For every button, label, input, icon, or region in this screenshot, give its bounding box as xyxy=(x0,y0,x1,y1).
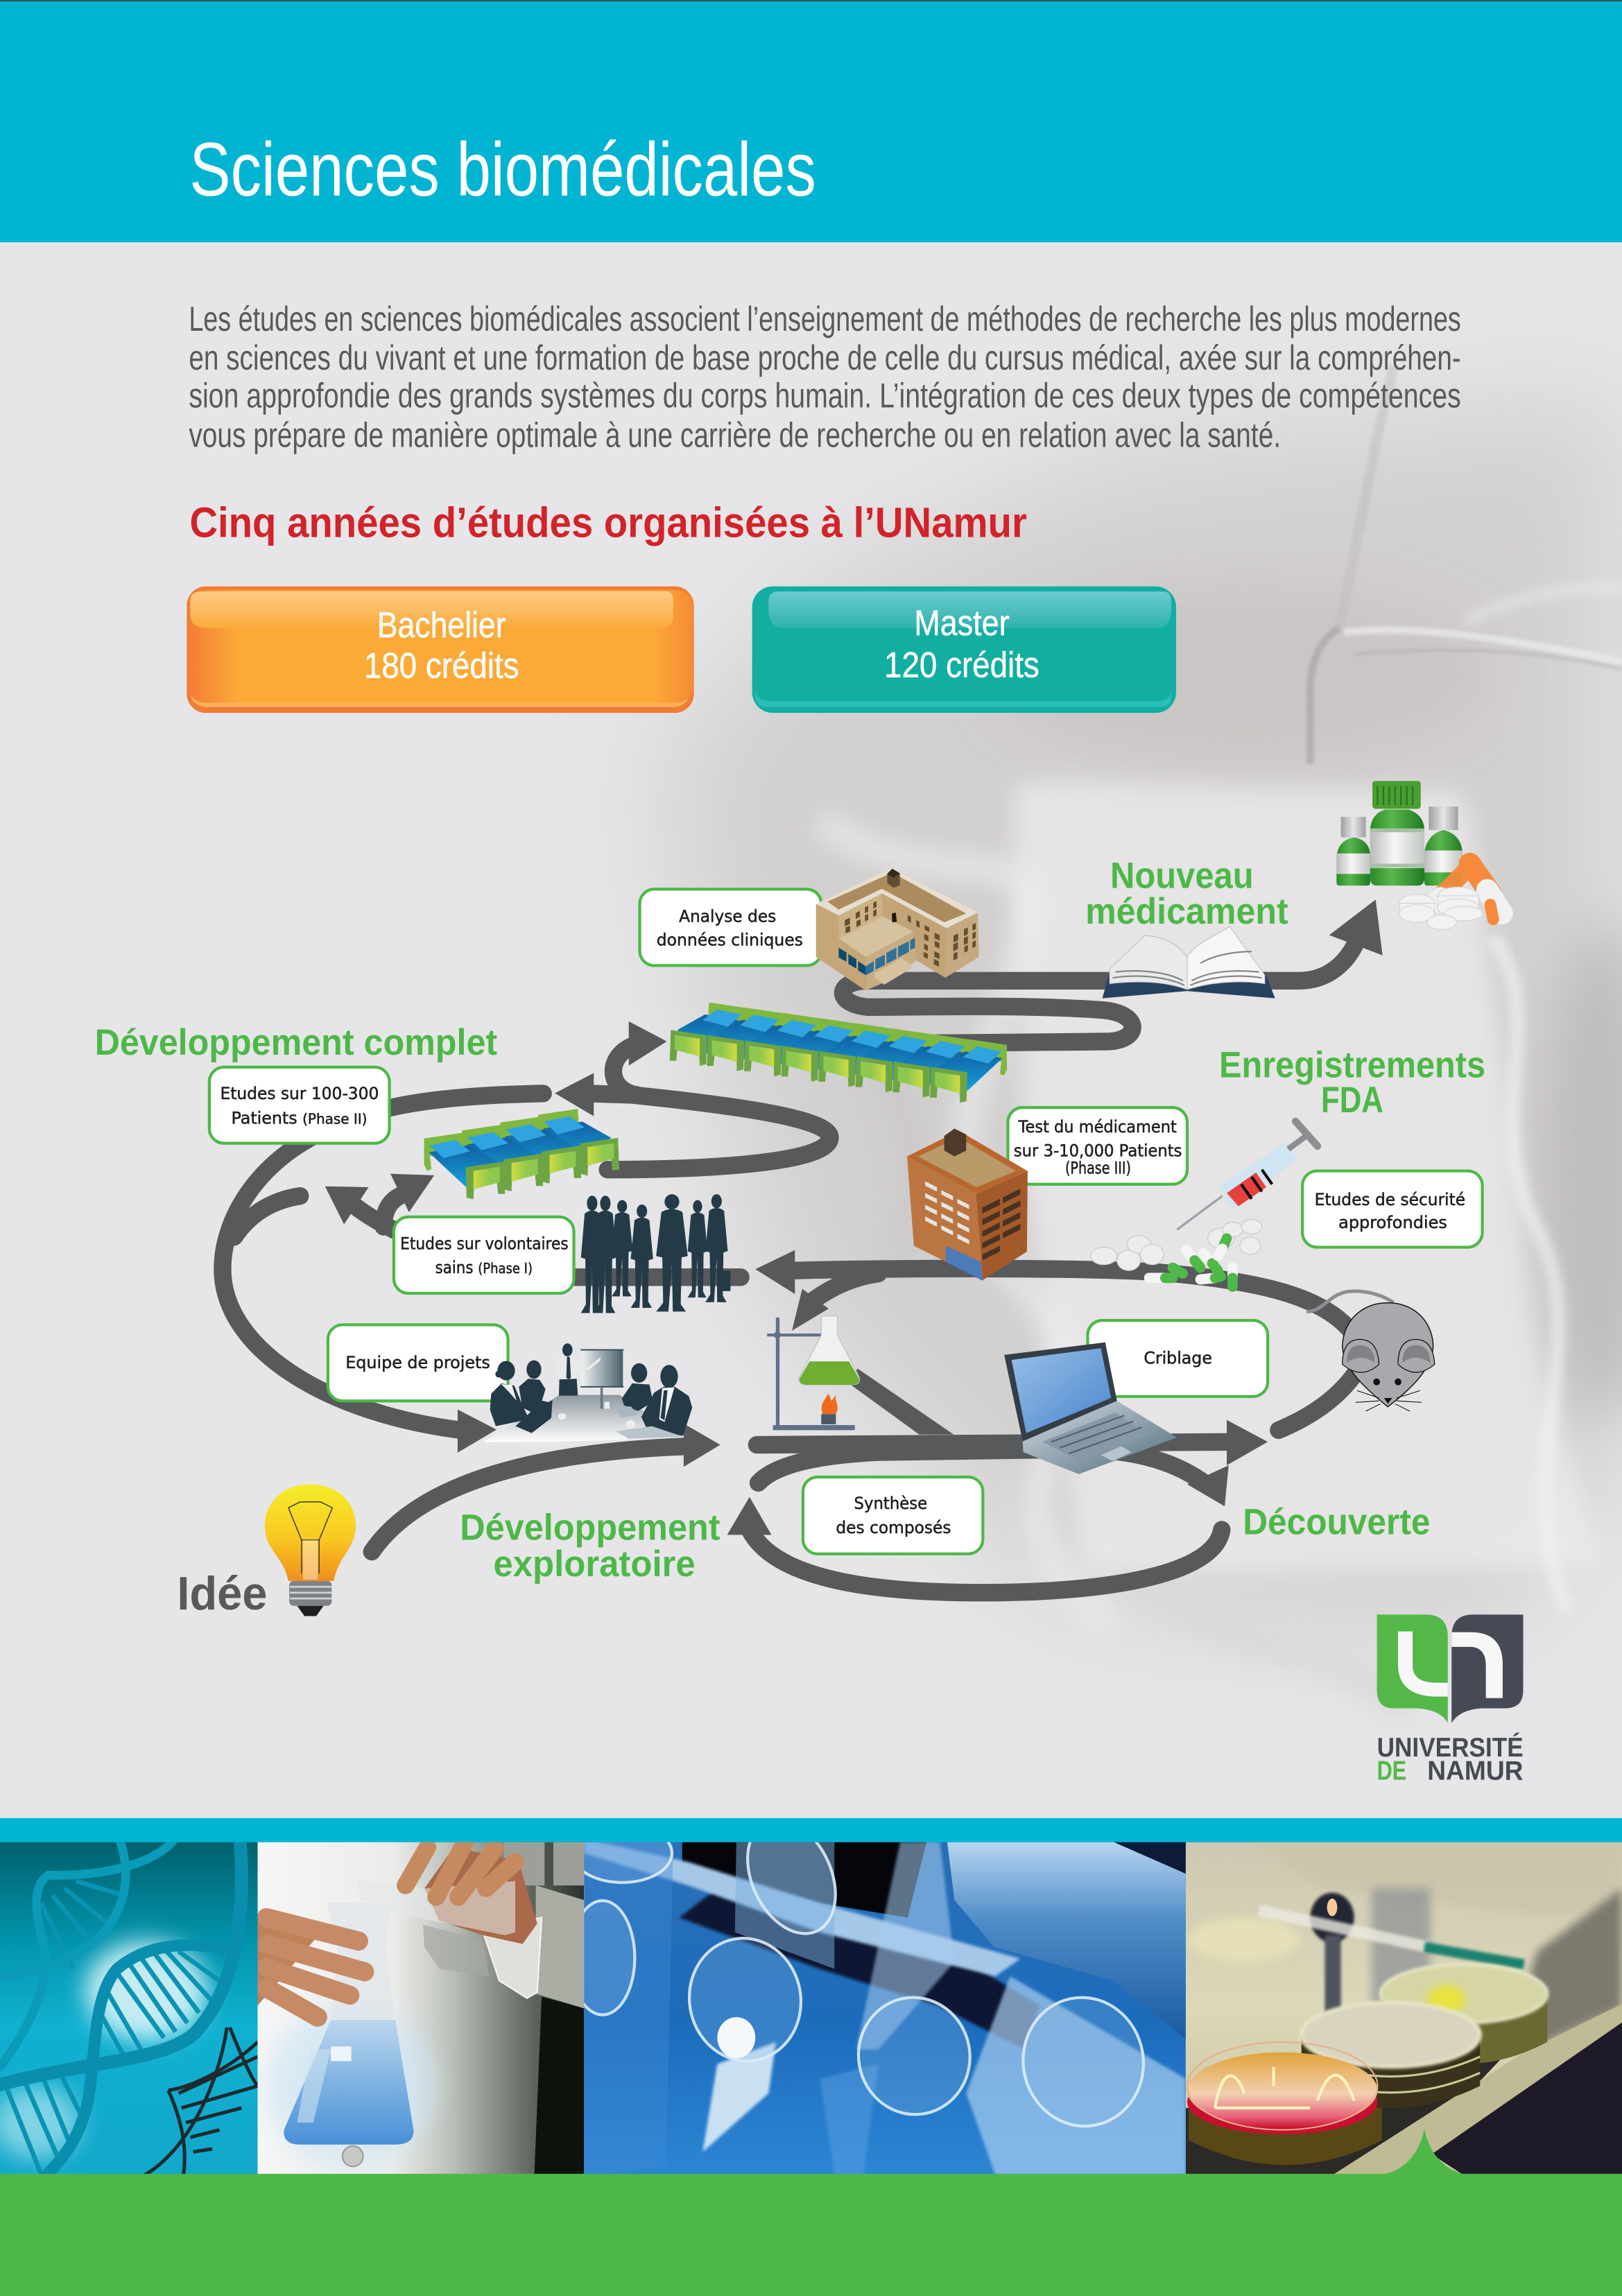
cyan band above photos xyxy=(0,1818,1622,1843)
green footer xyxy=(0,2174,1622,2296)
callout: phase I: sains (Phase I) xyxy=(435,1258,533,1277)
heading: new drug: médicament xyxy=(1085,891,1288,932)
callout: safety studies: Etudes de sécurité xyxy=(1315,1190,1465,1209)
arrow: up to long bed row xyxy=(613,1021,667,1095)
heading: FDA registrations: FDA xyxy=(1321,1080,1383,1121)
icon: syringe xyxy=(1177,1121,1318,1229)
photo: hands pouring blue liquid xyxy=(258,1842,584,2175)
callout: phase I xyxy=(394,1217,574,1293)
icon: medicine bottles xyxy=(1336,781,1463,886)
arrow: branch to discovery xyxy=(759,1449,1229,1506)
title: Sciences biomédicales xyxy=(189,128,816,212)
icon: pills and capsules xyxy=(1091,1219,1262,1287)
heading: discovery: Découverte xyxy=(1243,1501,1430,1542)
heading: full development: Développement complet xyxy=(95,1022,497,1063)
callout: project team: Equipe de projets xyxy=(345,1353,490,1372)
label: idea: Idée xyxy=(177,1568,267,1620)
intro paragraph: vous prépare de manière optimale à une carrière de recherche ou en relation avec la santé. xyxy=(189,416,1281,455)
arrow: from mouse up to first trials xyxy=(755,1250,1358,1430)
icon: four beds xyxy=(424,1109,619,1200)
logo: Université de Namur: UNIVERSITÉ xyxy=(1377,1732,1524,1763)
button: Bachelier: 180 crédits xyxy=(364,645,519,685)
callout: data analysis: Analyse des xyxy=(679,906,776,926)
callout: phase III xyxy=(1008,1107,1187,1184)
arrow: volunteers to left xyxy=(325,1186,403,1234)
arrow: branch back to flask xyxy=(792,1274,879,1331)
button: Master xyxy=(752,587,1176,713)
subheading: Cinq années d’études organisées à l’UNamur xyxy=(189,499,1027,546)
arrow: phase II beds loop xyxy=(555,1073,830,1170)
photo: petri dishes xyxy=(1186,1842,1622,2175)
photo: DNA helix xyxy=(0,1842,258,2178)
icon: open book xyxy=(1103,926,1275,999)
photo: test tubes xyxy=(584,1842,1186,2174)
icon: light bulb xyxy=(265,1485,356,1616)
heading: new drug: Nouveau xyxy=(1110,856,1254,897)
callout: safety studies xyxy=(1302,1171,1483,1248)
icon: laptop xyxy=(1004,1343,1177,1474)
heading: FDA registrations: Enregistrements xyxy=(1219,1044,1485,1085)
header band xyxy=(0,0,1622,242)
callout: compound synthesis: des composés xyxy=(836,1518,951,1537)
arrow: to new drug xyxy=(843,899,1383,1044)
arrow: volunteers strand xyxy=(576,1273,741,1281)
icon: mouse xyxy=(1306,1291,1435,1411)
callout: screening: Criblage xyxy=(1144,1348,1212,1367)
icon: long row of beds xyxy=(670,1003,1007,1103)
logo: Université de Namur: DE xyxy=(1377,1756,1406,1786)
heading: exploratory development: Développement xyxy=(460,1508,721,1548)
icon: white tablets and orange capsules xyxy=(1399,863,1502,929)
roadmap arrows xyxy=(223,899,1383,1593)
callout: compound synthesis: Synthèse xyxy=(854,1494,927,1513)
button: Bachelier: Bachelier xyxy=(377,605,506,645)
top edge line xyxy=(0,0,1622,1)
heading: exploratory development xyxy=(460,1508,721,1585)
icon: project team meeting xyxy=(483,1343,692,1442)
callout: safety studies: approfondies xyxy=(1338,1213,1447,1232)
arrow: volunteers to beds xyxy=(383,1174,434,1227)
arrow: outer loop to project team xyxy=(223,1094,543,1453)
heading: new drug xyxy=(1085,856,1288,932)
callout: phase III: Test du médicament xyxy=(1018,1117,1177,1137)
footer peak notch xyxy=(1377,2128,1472,2175)
heading: FDA registrations xyxy=(1219,1044,1485,1121)
button: Master: Master xyxy=(914,603,1010,643)
callout: data analysis xyxy=(640,889,821,965)
callout: phase II xyxy=(209,1067,390,1143)
arrow: outer loop branch xyxy=(234,1196,300,1237)
callout: phase III: (Phase III) xyxy=(1065,1159,1131,1178)
icon: flask on stand xyxy=(767,1316,859,1430)
icon: volunteers silhouettes xyxy=(581,1194,730,1313)
arrow: diagonal toward flask xyxy=(845,1369,954,1435)
callout: screening xyxy=(1087,1320,1268,1397)
callout: project team xyxy=(328,1324,508,1401)
icon: hospital building, analysis xyxy=(816,868,979,990)
logo: Université de Namur: NAMUR xyxy=(1427,1756,1524,1786)
button: Master: 120 crédits xyxy=(884,644,1039,684)
icon: office building, phase III xyxy=(907,1129,1028,1281)
callout: phase II: Patients (Phase II) xyxy=(232,1108,367,1128)
callout: phase II: Etudes sur 100-300 xyxy=(220,1084,379,1103)
callout: phase III: sur 3-10,000 Patients xyxy=(1014,1141,1182,1161)
callout: phase I: Etudes sur volontaires xyxy=(400,1234,569,1253)
intro paragraph xyxy=(189,300,1461,455)
button: Bachelier xyxy=(187,587,694,713)
callout: data analysis: données cliniques xyxy=(657,930,803,949)
callout: compound synthesis xyxy=(803,1477,983,1554)
heading: exploratory development: exploratoire xyxy=(493,1544,696,1585)
arrow: main line to discovery xyxy=(757,1420,1268,1465)
logo: Université de Namur xyxy=(1377,1614,1524,1786)
arrow: compound synthesis loop xyxy=(727,1497,1222,1593)
arrow: idea to exploratory development xyxy=(372,1424,721,1552)
